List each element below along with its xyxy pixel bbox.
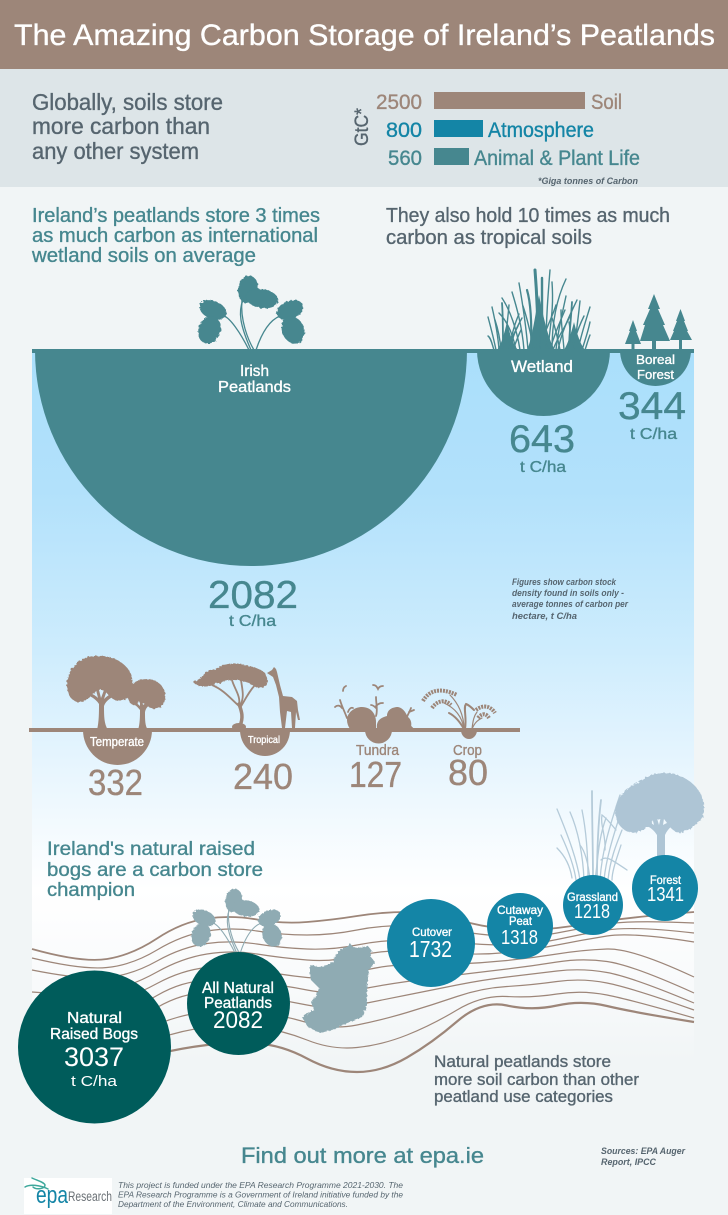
bubble: forest: 1341 xyxy=(647,884,684,906)
funding statement xyxy=(118,1180,403,1209)
bar chart: soil xyxy=(376,91,622,114)
label: boreal forest: Boreal xyxy=(636,352,675,367)
text: three times wetland soils xyxy=(31,205,320,267)
bubble: grassland xyxy=(563,875,623,935)
bubble: forest: Forest xyxy=(650,873,682,887)
bubble: natural raised bogs: Natural xyxy=(67,1010,122,1027)
logo: EPA Research xyxy=(24,1178,112,1214)
icon: giraffe xyxy=(267,667,300,728)
label: irish peatlands xyxy=(218,363,291,396)
sources: Sources: EPA Auger xyxy=(601,1146,686,1157)
text: natural peatlands store more: Natural peatlands store xyxy=(434,1053,611,1071)
bubble: cutaway peat: Peat xyxy=(509,914,533,928)
ground line: other soils xyxy=(29,728,520,732)
text: natural peatlands store more xyxy=(434,1053,640,1106)
text: ten times tropical soils: carbon as tropical soils xyxy=(386,226,592,249)
text: natural peatlands store more: peatland use categories xyxy=(434,1088,613,1106)
icon: pale grasses xyxy=(557,791,627,880)
icon: boreal trees xyxy=(625,294,692,351)
text: raised bogs champion: champion xyxy=(47,879,135,901)
value: wetland 643: 643 xyxy=(509,418,575,461)
bubble: all natural peatlands: 2082 xyxy=(213,1007,263,1034)
text: natural peatlands store more: more soil carbon than other xyxy=(434,1071,640,1089)
bubble: all natural peatlands xyxy=(187,952,290,1055)
bubble: cutaway peat: Cutaway xyxy=(497,903,543,917)
bubble: grassland: Grassland xyxy=(567,890,618,904)
bubble: all natural peatlands: Peatlands xyxy=(204,995,272,1012)
axis label GtC: GtC* xyxy=(352,107,373,146)
bubble: all natural peatlands: All Natural xyxy=(202,980,274,997)
value: boreal 344: t C/ha xyxy=(630,426,677,443)
icon: tundra rocks and plants xyxy=(335,685,415,731)
call to action: Find out more at epa.ie xyxy=(241,1143,484,1168)
funding statement: EPA Research Programme is a Government of Ireland initiative funded by the xyxy=(118,1190,403,1200)
header banner xyxy=(0,0,728,69)
note: figures show carbon density: density found in soils only - xyxy=(512,588,624,599)
chart: boreal forest semicircle xyxy=(620,350,691,386)
sources xyxy=(601,1146,686,1168)
text: raised bogs champion: bogs are a carbon store xyxy=(47,859,263,881)
label: boreal forest xyxy=(636,352,675,382)
label: tropical: Tropical xyxy=(248,734,280,746)
bubble: natural raised bogs: t C/ha xyxy=(71,1073,118,1090)
icon: acacia tree xyxy=(193,663,267,731)
bar chart: animal and plant life: Animal & Plant Life xyxy=(474,147,640,170)
text: globally soils store more: any other system xyxy=(32,138,199,164)
bubble: cutover: 1732 xyxy=(409,936,452,962)
note: figures show carbon density: Figures show carbon stock xyxy=(512,577,617,588)
icon: wetland grasses xyxy=(488,270,590,350)
bubble: natural raised bogs: 3037 xyxy=(64,1042,124,1072)
bar chart: atmosphere: 800 xyxy=(386,119,422,142)
text: raised bogs champion xyxy=(47,838,263,901)
peat layer contour lines xyxy=(32,912,694,1085)
bubble: cutaway peat: 1318 xyxy=(501,927,538,949)
icon: peat plant xyxy=(194,274,308,350)
value: irish peatlands 2082: 2082 xyxy=(208,574,298,617)
label: temperate: Temperate xyxy=(90,735,144,749)
text: three times wetland soils: as much carbon as international xyxy=(32,225,318,247)
icon: pale tree xyxy=(615,773,704,860)
logo wordmark xyxy=(36,1182,112,1209)
bar chart: soil: Soil xyxy=(591,91,622,114)
funding statement: This project is funded under the EPA Research Programme 2021-2030. The xyxy=(118,1180,403,1190)
sky gradient panel xyxy=(32,349,694,1060)
value: 80: 80 xyxy=(448,752,488,793)
bubble: natural raised bogs: Raised Bogs xyxy=(50,1026,138,1043)
chart: temperate xyxy=(83,730,152,765)
chart: irish peatlands semicircle xyxy=(35,350,467,566)
chart: tundra xyxy=(356,730,400,759)
funding statement: Department of the Environment, Climate and Communications. xyxy=(118,1199,348,1209)
text: three times wetland soils: Ireland’s peatlands store 3 times xyxy=(32,205,320,227)
bar chart: soil: 2500 xyxy=(376,91,422,114)
logo wordmark: epa xyxy=(36,1182,69,1209)
label: wetland: Wetland xyxy=(511,357,573,376)
bubble: grassland: 1218 xyxy=(574,901,610,923)
text: raised bogs champion: Ireland's natural raised xyxy=(47,838,255,860)
text: globally soils store more xyxy=(32,89,223,164)
value: wetland 643: t C/ha xyxy=(520,459,566,476)
note: figures show carbon density: average tonnes of carbon per xyxy=(512,599,629,610)
label: irish peatlands: Irish xyxy=(240,363,269,380)
label: crop: Crop xyxy=(453,743,482,759)
ground line xyxy=(32,349,694,353)
bubble: forest xyxy=(632,855,698,921)
bar chart: atmosphere: Atmosphere xyxy=(488,119,594,142)
text: globally soils store more: more carbon than xyxy=(32,113,210,139)
bar chart: atmosphere xyxy=(386,119,594,142)
label: tundra: Tundra xyxy=(356,743,400,759)
label: irish peatlands: Peatlands xyxy=(218,379,291,396)
bar chart: animal and plant life xyxy=(388,147,640,170)
panel: global carbon stores xyxy=(0,69,728,187)
sources: Report, IPCC xyxy=(601,1157,656,1168)
bubble: cutover xyxy=(387,899,475,987)
value: 127: 127 xyxy=(349,754,402,795)
bubble: cutover: Cutover xyxy=(412,925,452,939)
icon: rice crop xyxy=(423,691,495,729)
chart: crop xyxy=(453,730,482,759)
bar chart: animal and plant life: 560 xyxy=(388,147,422,170)
bubble: natural raised bogs xyxy=(18,970,171,1124)
note: figures show carbon density xyxy=(512,577,629,622)
text: three times wetland soils: wetland soils on average xyxy=(31,245,256,267)
text: globally soils store more: Globally, soils store xyxy=(32,89,223,115)
chart: wetland semicircle xyxy=(477,350,610,416)
icon: map of Ireland xyxy=(302,943,375,1033)
logo wordmark: Research xyxy=(68,1189,112,1204)
value: 240: 240 xyxy=(233,756,293,797)
icon: logo swirl xyxy=(25,1178,48,1189)
title: The Amazing Carbon Storage of Ireland’s Peatlands xyxy=(14,19,715,52)
value: boreal 344: 344 xyxy=(618,385,686,428)
value: irish peatlands 2082: t C/ha xyxy=(229,613,276,630)
note: figures show carbon density: hectare, t C/ha xyxy=(512,611,577,622)
footnote: giga tonnes: *Giga tonnes of Carbon xyxy=(538,176,638,187)
bubble: cutaway peat xyxy=(487,893,553,959)
text: ten times tropical soils xyxy=(386,204,670,249)
text: ten times tropical soils: They also hold 10 times as much xyxy=(386,204,670,227)
value: 332: 332 xyxy=(88,762,143,803)
icon: blue-grey peat plant xyxy=(188,888,285,952)
label: boreal forest: Forest xyxy=(637,367,674,382)
icon: temperate trees xyxy=(67,656,165,730)
chart: tropical xyxy=(240,730,290,756)
